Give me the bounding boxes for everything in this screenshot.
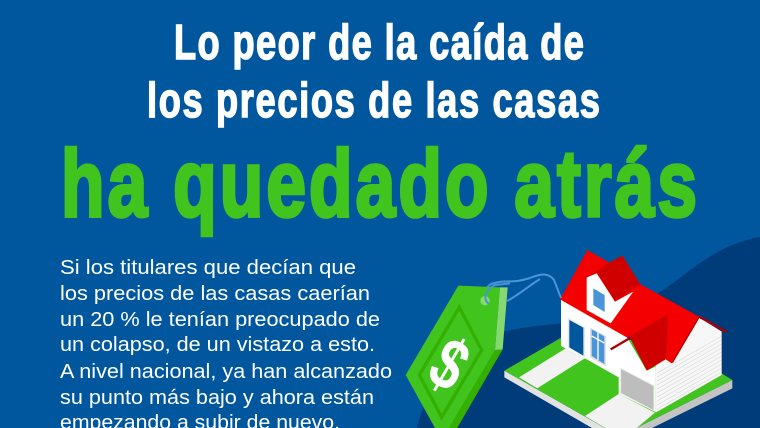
dollar sign: $ xyxy=(416,321,483,407)
driveway xyxy=(585,394,655,428)
slab right side xyxy=(620,380,732,428)
slab top green xyxy=(504,337,732,428)
title line 1: Lo peor de la caída de xyxy=(174,16,584,70)
body text: A nivel nacional, ya han alcanzado xyxy=(60,360,392,383)
illustration: tag string xyxy=(484,274,561,304)
tag light edge xyxy=(495,287,508,350)
body text: Si los titulares que decían que xyxy=(60,256,356,279)
roof eaves xyxy=(611,317,727,349)
dormer front xyxy=(587,273,633,323)
illustration: house xyxy=(504,250,732,428)
garage door xyxy=(621,368,654,411)
title xyxy=(61,16,697,236)
body text: los precios de las casas caerían xyxy=(60,282,370,305)
body text: un colapso, de un vistazo a esto. xyxy=(60,333,375,356)
illustration: price tag xyxy=(406,283,510,428)
tag hole xyxy=(480,296,490,305)
roof shadow xyxy=(672,317,699,363)
title highlight: ha quedado atrás xyxy=(61,130,697,236)
body text xyxy=(60,256,392,428)
front wall xyxy=(561,299,656,412)
door xyxy=(569,320,583,356)
tag string loop xyxy=(485,283,510,304)
window bars xyxy=(592,333,604,360)
background wave xyxy=(417,237,760,428)
window glass xyxy=(592,329,604,364)
dormer window xyxy=(593,288,605,312)
gable roof xyxy=(629,315,668,371)
tag dark edge xyxy=(437,349,503,428)
door frame xyxy=(568,317,585,357)
slab left side xyxy=(504,371,620,428)
tag inner diamond xyxy=(419,307,482,417)
front lawn xyxy=(537,359,619,416)
body text: un 20 % le tenían preocupado de xyxy=(60,308,380,331)
window frame xyxy=(590,327,606,367)
title line 2: los precios de las casas xyxy=(147,74,600,128)
main roof xyxy=(560,250,699,363)
siding stripes xyxy=(657,336,722,409)
body text: su punto más bajo y ahora están xyxy=(60,386,374,409)
tag body xyxy=(406,286,500,428)
dormer roof xyxy=(579,256,640,302)
side wall xyxy=(656,317,722,413)
walkway xyxy=(519,348,585,388)
